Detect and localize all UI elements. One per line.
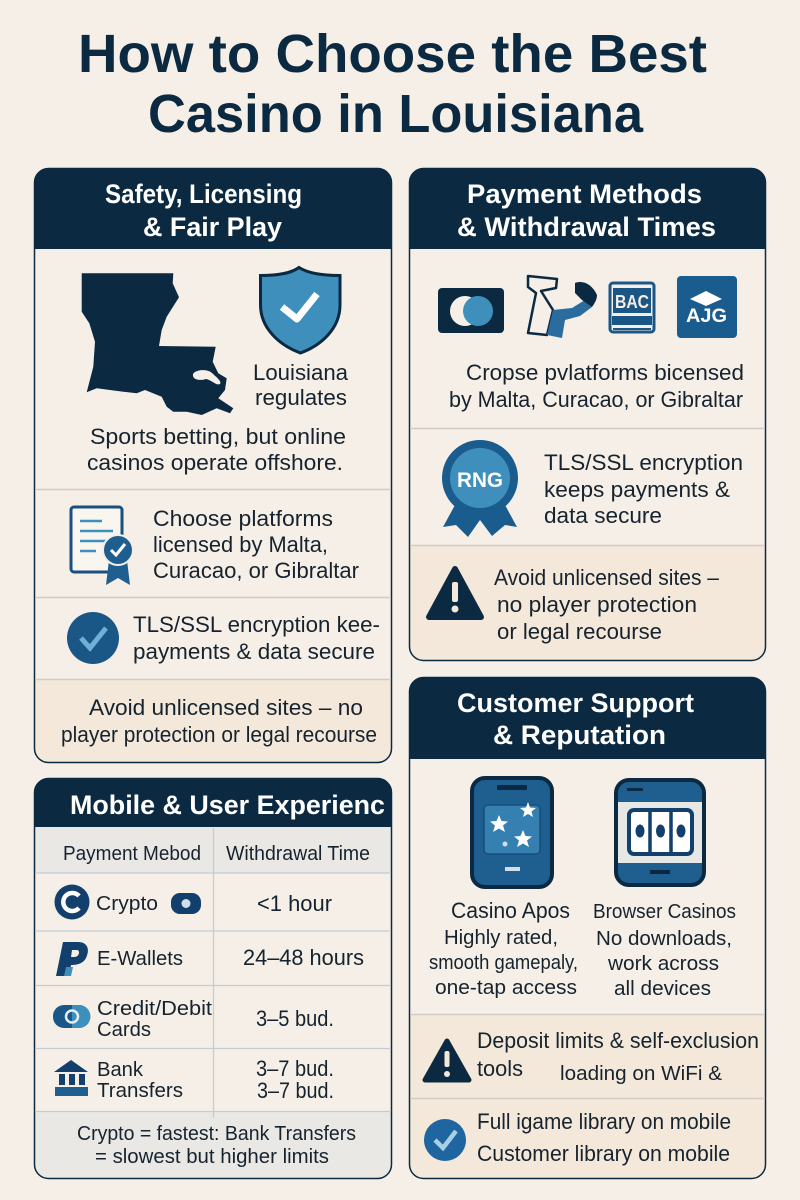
heading: safety xyxy=(105,179,302,242)
row: bank transfers xyxy=(54,1056,334,1103)
text: avoid unlicensed sites xyxy=(61,695,377,747)
icon: check circle xyxy=(424,1119,466,1161)
text: avoid unlicensed sites: player protection or legal recourse xyxy=(61,722,377,747)
panel: safety, licensing and fair play xyxy=(34,168,392,762)
text: deposit limits: Deposit limits & self-exclusion xyxy=(477,1028,759,1053)
row: bank transfers: 3–7 bud. xyxy=(256,1056,334,1081)
title: Casino in Louisiana xyxy=(148,84,644,144)
panel: customer support and reputation xyxy=(410,678,766,1178)
text: Louisiana regulates xyxy=(253,360,349,410)
table footer note: Crypto = fastest: Bank Transfers xyxy=(77,1123,356,1145)
icon: RNG rosette xyxy=(442,440,518,537)
heading: payment methods: Payment Methods xyxy=(467,179,702,209)
text: avoid unlicensed xyxy=(494,565,720,644)
text: sports betting: casinos operate offshore. xyxy=(87,450,343,475)
row: crypto xyxy=(54,884,332,920)
row: bank transfers: 3–7 bud. xyxy=(257,1078,334,1103)
text: licensed platforms: Curacao, or Gibraltar xyxy=(153,558,359,583)
row: credit and debit cards: Cards xyxy=(97,1019,151,1041)
panel: mobile and user experience table xyxy=(34,778,392,1178)
text: licensed platforms: Choose platforms xyxy=(153,506,333,531)
icon: check circle xyxy=(67,612,119,664)
icon: warning triangle xyxy=(425,1041,469,1080)
text: licensed platforms: licensed by Malta, xyxy=(153,532,328,557)
text: casino apps: smooth gamepaly, xyxy=(429,952,578,974)
text: avoid unlicensed: Avoid unlicensed sites – xyxy=(494,565,720,590)
text: sports betting xyxy=(87,424,346,475)
icon: license document xyxy=(71,507,133,585)
heading: payment methods xyxy=(457,179,716,242)
icon: AJG badge: AJG xyxy=(686,306,727,327)
text: avoid unlicensed: no player protection xyxy=(497,592,697,617)
text: platforms licensed: by Malta, Curacao, or Gibraltar xyxy=(449,387,743,412)
icon: warning triangle xyxy=(429,569,481,617)
heading: payment methods: & Withdrawal Times xyxy=(457,212,716,242)
text: avoid unlicensed: or legal recourse xyxy=(497,619,662,644)
text: encryption xyxy=(133,612,380,664)
text: game library: Customer library on mobile xyxy=(477,1141,730,1166)
row: bank transfers: Bank xyxy=(97,1059,144,1081)
row: e-wallets: E-Wallets xyxy=(97,948,183,970)
text: game library: Full igame library on mobile xyxy=(477,1109,731,1134)
table footer note xyxy=(77,1123,356,1168)
icon: bank logo: BAC xyxy=(615,292,649,312)
table footer note: = slowest but higher limits xyxy=(95,1146,329,1168)
text: TLS/SSL encryption: data secure xyxy=(544,503,662,528)
row: credit and debit cards: Credit/Debit xyxy=(97,998,212,1020)
row: credit and debit cards xyxy=(53,998,334,1041)
text: encryption: payments & data secure xyxy=(133,639,375,664)
heading: customer support: & Reputation xyxy=(493,720,666,750)
text: avoid unlicensed sites: Avoid unlicensed sites – no xyxy=(89,695,363,720)
text: game library xyxy=(477,1109,731,1166)
text: browser casinos xyxy=(593,901,736,1000)
text: TLS/SSL encryption: keeps payments & xyxy=(544,477,730,502)
text: TLS/SSL encryption xyxy=(544,450,743,528)
text: browser casinos: all devices xyxy=(614,978,711,1000)
text: casino apps: one-tap access xyxy=(435,977,577,999)
icon: AJG badge xyxy=(677,276,737,338)
text: deposit limits: loading on WiFi & xyxy=(560,1063,723,1085)
icon: bank logo xyxy=(610,283,654,332)
row: crypto: Crypto xyxy=(96,893,158,915)
text: browser casinos: work across xyxy=(607,953,719,975)
text: platforms licensed: Cropse pvlatforms bicensed xyxy=(466,360,744,385)
text: casino apps xyxy=(429,898,578,999)
table header: Withdrawal Time xyxy=(226,843,370,865)
row: bank transfers: Transfers xyxy=(97,1080,183,1102)
icon: RNG rosette: RNG xyxy=(457,469,503,492)
panel: payment methods and withdrawal times xyxy=(410,168,766,660)
icon: browser with slot machine xyxy=(616,780,704,885)
heading: mobile: Mobile & User Experienc xyxy=(70,790,385,820)
text: encryption: TLS/SSL encryption kee- xyxy=(133,612,380,637)
heading: safety: Safety, Licensing xyxy=(105,179,302,209)
text: deposit limits: tools xyxy=(477,1056,523,1081)
row: e-wallets xyxy=(56,942,364,976)
icon: phone with stars xyxy=(472,778,552,887)
icon: card xyxy=(438,288,504,333)
text: licensed platforms xyxy=(153,506,359,583)
text: deposit limits xyxy=(477,1028,759,1085)
table header xyxy=(63,843,370,865)
heading: customer support: Customer Support xyxy=(457,688,694,718)
title: How to Choose the Best xyxy=(78,24,707,84)
row: credit and debit cards: 3–5 bud. xyxy=(256,1006,334,1031)
icon: wallet logo xyxy=(528,276,597,338)
text: casino apps: Highly rated, xyxy=(444,927,558,949)
table header: Payment Mebod xyxy=(63,843,201,865)
text: browser casinos: No downloads, xyxy=(596,928,732,950)
title xyxy=(78,24,707,144)
icon: shield with check xyxy=(260,268,340,353)
text: TLS/SSL encryption: TLS/SSL encryption xyxy=(544,450,743,475)
row: e-wallets: 24–48 hours xyxy=(243,945,364,970)
heading: customer support xyxy=(457,688,694,750)
icon: Louisiana state map xyxy=(82,273,233,415)
text: sports betting: Sports betting, but online xyxy=(90,424,346,449)
text: Louisiana regulates: Louisiana xyxy=(253,360,349,385)
text: browser casinos: Browser Casinos xyxy=(593,901,736,923)
row: crypto: <1 hour xyxy=(257,891,332,916)
text: platforms licensed xyxy=(449,360,744,412)
text: casino apps: Casino Apos xyxy=(451,898,570,923)
heading: safety: & Fair Play xyxy=(143,212,282,242)
text: Louisiana regulates: regulates xyxy=(255,385,347,410)
